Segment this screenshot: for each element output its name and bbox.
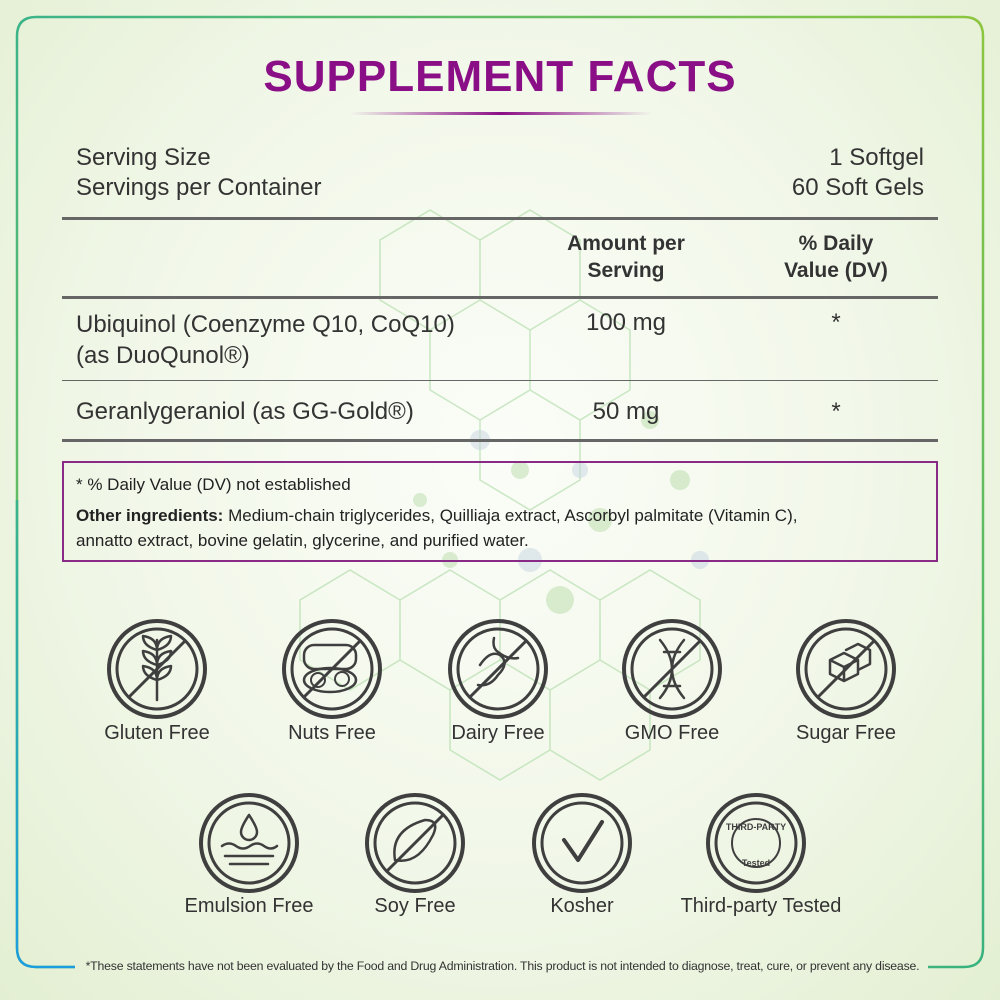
facts table: Geranlygeraniol (as GG-Gold®) — [76, 398, 414, 425]
facts table: * — [831, 398, 841, 425]
title: SUPPLEMENT FACTS — [263, 52, 737, 101]
disclaimer: *These statements have not been evaluated by the Food and Drug Administration. This product is not intended to diagnose, treat, cure, or prevent any disease. — [86, 959, 919, 973]
facts table: % Daily — [799, 232, 873, 255]
facts table — [62, 217, 938, 442]
serving info: 60 Soft Gels — [792, 174, 924, 201]
text: Third-party Tested — [681, 895, 841, 917]
serving info: 1 Softgel — [829, 144, 924, 171]
icon: dairy free — [450, 621, 546, 717]
text: Nuts Free — [288, 722, 376, 744]
icon: sugar free — [798, 621, 894, 717]
facts table: * — [831, 309, 841, 336]
text: Sugar Free — [796, 722, 896, 744]
ingredients box — [62, 461, 938, 562]
ingredients box: annatto extract, bovine gelatin, glycerine, and purified water. — [76, 531, 529, 550]
icon: nuts free — [284, 621, 380, 717]
facts table: Serving — [587, 259, 665, 282]
icon: third-party tested — [708, 795, 804, 891]
facts table: Amount per — [567, 232, 685, 255]
facts table: Value (DV) — [784, 259, 888, 282]
text: Soy Free — [374, 895, 456, 917]
text: Emulsion Free — [185, 895, 313, 917]
icon: gluten free — [109, 621, 205, 717]
title underline — [350, 112, 652, 115]
ingredients box: Other ingredients: Medium-chain triglycerides, Quilliaja extract, Ascorbyl palmitate (Vitamin C), — [76, 506, 797, 525]
icon: third-party tested: Tested — [742, 858, 770, 868]
text: Dairy Free — [451, 722, 545, 744]
facts table: 100 mg — [586, 309, 666, 336]
icon: emulsion free — [201, 795, 297, 891]
serving info: Servings per Container — [76, 174, 321, 201]
serving info: Serving Size — [76, 144, 211, 171]
icon labels: Gluten Free — [104, 722, 210, 744]
icon: gmo free — [624, 621, 720, 717]
serving info — [76, 144, 924, 201]
facts table: Ubiquinol (Coenzyme Q10, CoQ10) — [76, 311, 455, 338]
text: GMO Free — [625, 722, 719, 744]
icon: soy free — [367, 795, 463, 891]
icon: third-party tested: THIRD-PARTY — [726, 822, 786, 832]
facts table: 50 mg — [593, 398, 659, 425]
icon: kosher — [534, 795, 630, 891]
ingredients box: * % Daily Value (DV) not established — [76, 475, 351, 494]
facts table: (as DuoQunol®) — [76, 342, 250, 369]
text: Kosher — [550, 895, 614, 917]
